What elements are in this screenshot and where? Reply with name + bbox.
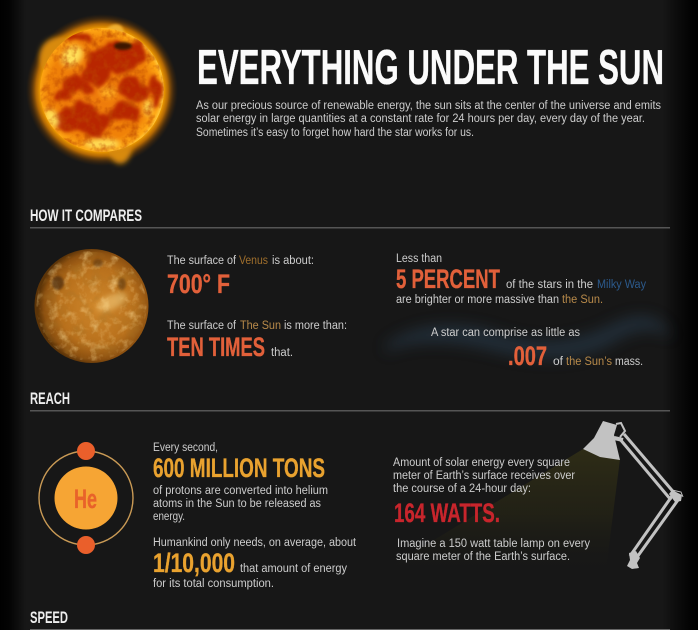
solar energy text: Imagine a 150 watt table lamp on every [397, 538, 590, 550]
venus temperature text: 700° F [167, 269, 230, 299]
intro text: Sometimes it’s easy to forget how hard the star works for us. [196, 127, 474, 139]
intro text: As our precious source of renewable energy, the sun sits at the center of the universe and emits [196, 100, 661, 112]
star mass text [431, 327, 643, 371]
sun temperature text: is more than: [284, 320, 347, 332]
decorative wave: milky way [386, 316, 672, 359]
sun temperature text [167, 320, 347, 362]
protons text: Every second, [153, 442, 218, 454]
star brightness text: Milky Way [597, 279, 646, 291]
star mass text: .007 [508, 341, 547, 371]
icon: desk lamp [583, 421, 683, 569]
solar energy text: Amount of solar energy every square [393, 457, 570, 469]
icon: sun [26, 14, 178, 166]
light beam [385, 449, 620, 570]
protons text: of protons are converted into helium [153, 485, 328, 497]
consumption text [153, 537, 357, 590]
icon: venus [34, 249, 148, 363]
star brightness text: the Sun. [562, 294, 603, 306]
protons text: energy. [153, 511, 185, 523]
star brightness text [396, 253, 646, 306]
solar energy text: 164 WATTS. [394, 498, 500, 528]
venus temperature text: The surface of [167, 255, 237, 267]
star brightness text: 5 PERCENT [396, 264, 500, 294]
protons text [153, 442, 328, 523]
sun temperature text: that. [271, 347, 293, 359]
star brightness text: Less than [396, 253, 442, 265]
star brightness text: of the stars in the [506, 279, 593, 291]
protons text: atoms in the Sun to be released as [153, 498, 321, 510]
star mass text: of [553, 356, 564, 368]
consumption text: Humankind only needs, on average, about [153, 537, 357, 549]
star mass text: mass. [615, 356, 643, 368]
intro text [196, 100, 661, 139]
protons text: 600 MILLION TONS [153, 453, 325, 483]
solar energy text: meter of Earth’s surface receives over [393, 470, 575, 482]
solar energy text: square meter of the Earth’s surface. [396, 551, 570, 563]
heading: how it compares: HOW IT COMPARES [30, 206, 142, 225]
venus temperature text [167, 255, 314, 299]
star mass text: the Sun’s [566, 356, 612, 368]
consumption text: for its total consumption. [153, 578, 274, 590]
sun temperature text: The Sun [240, 320, 281, 332]
icon: helium atom: He [74, 484, 97, 514]
consumption text: that amount of energy [240, 563, 347, 575]
solar energy text: the course of a 24-hour day: [393, 483, 531, 495]
consumption text: 1/10,000 [153, 548, 235, 578]
sun temperature text: TEN TIMES [167, 332, 265, 362]
heading: speed: SPEED [30, 608, 68, 627]
venus temperature text: is about: [272, 255, 314, 267]
icon: helium atom [39, 442, 133, 554]
intro text: solar energy in large quantities at a constant rate for 24 hours per day, every day of the year. [196, 113, 645, 125]
star mass text: A star can comprise as little as [431, 327, 580, 339]
venus temperature text: Venus [239, 255, 268, 267]
star brightness text: are brighter or more massive than [396, 294, 559, 306]
solar energy text [393, 457, 590, 563]
heading: reach: REACH [30, 389, 70, 408]
sun temperature text: The surface of [167, 320, 237, 332]
